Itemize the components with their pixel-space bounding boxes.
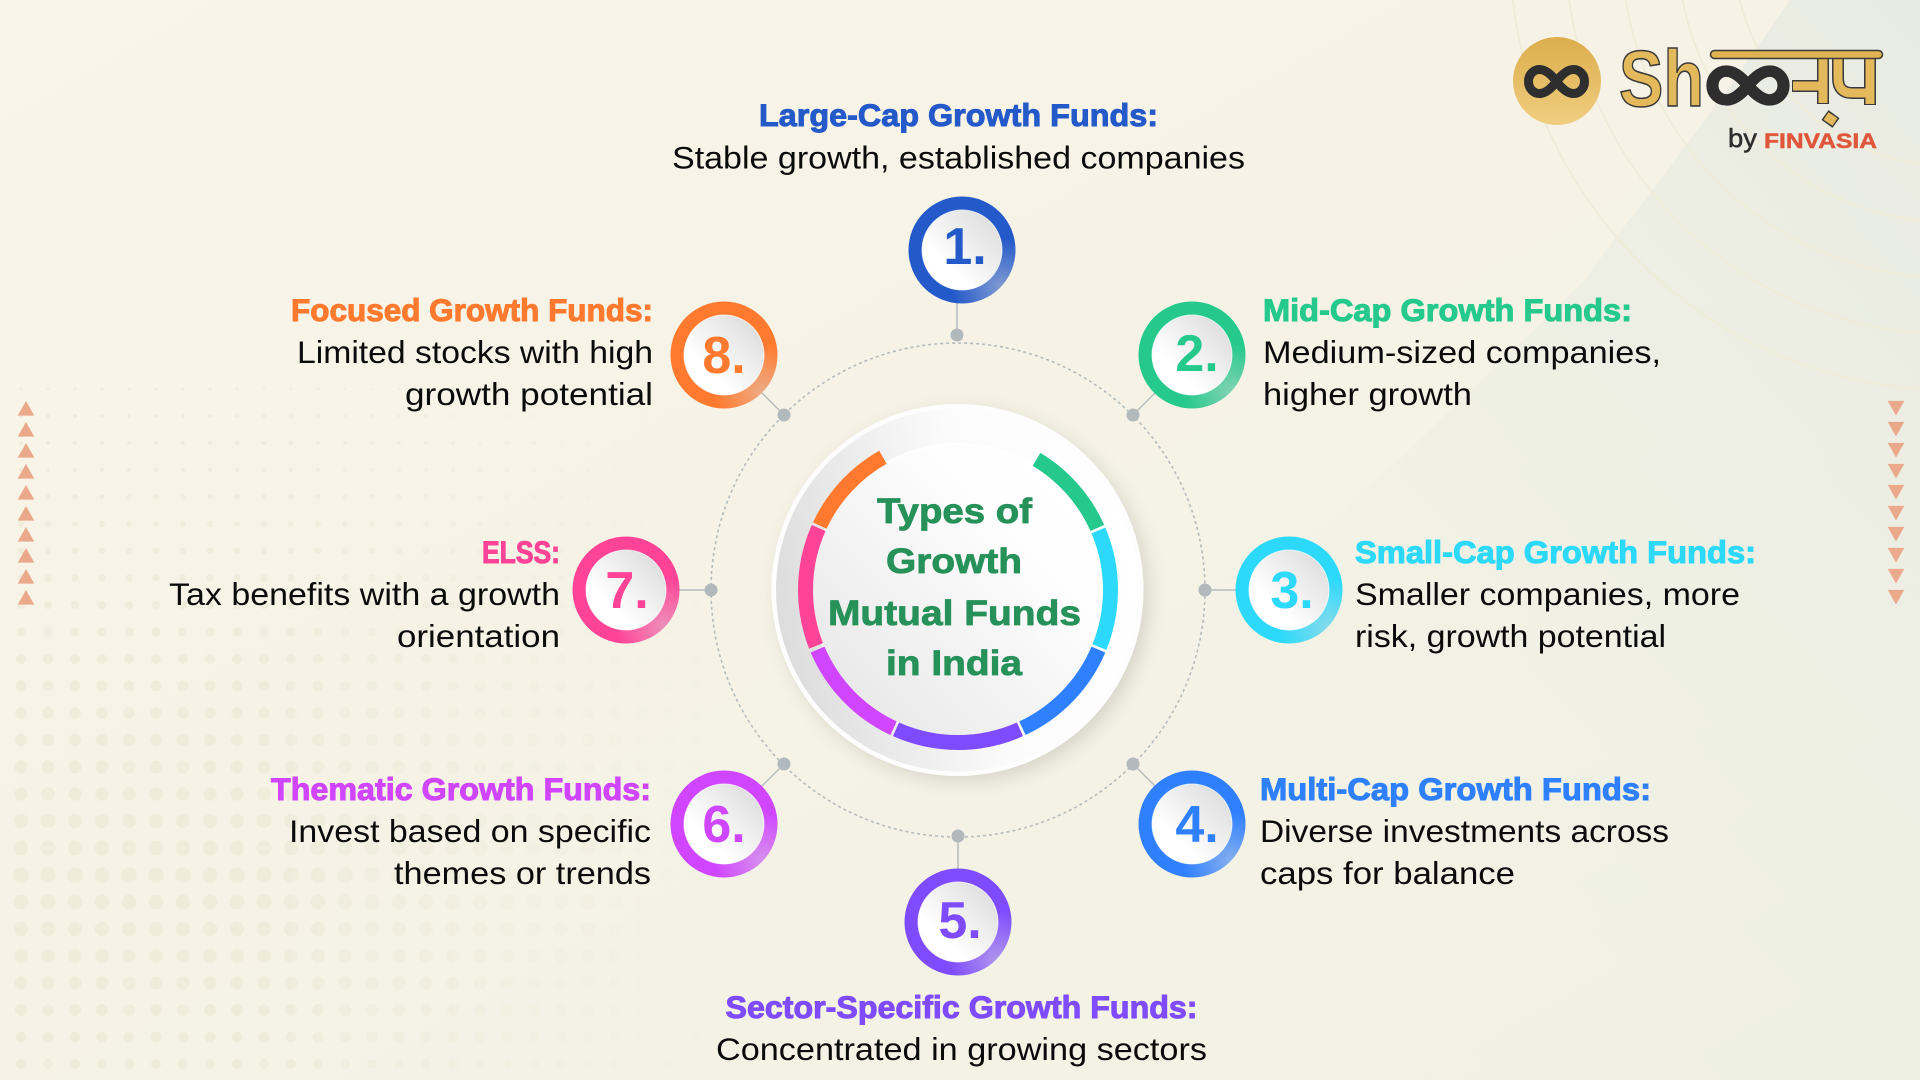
badge 8: 8. bbox=[702, 327, 746, 385]
logo: Shoonya by Finvasia bbox=[1513, 34, 1882, 153]
item 4 text: Diverse investments across bbox=[1260, 813, 1669, 849]
logo icon: gold circle with infinity bbox=[1513, 37, 1601, 125]
item 3 text: Small-Cap Growth Funds: bbox=[1355, 534, 1756, 570]
logo wordmark stylised brand mark bbox=[1710, 50, 1882, 123]
badge 2 bbox=[1138, 302, 1246, 408]
segmented colour ring bbox=[806, 438, 1110, 742]
item 4 text bbox=[1260, 771, 1669, 891]
logo wordmark infinity bbox=[1712, 71, 1784, 100]
item 2 text: higher growth bbox=[1263, 376, 1472, 412]
central title: Mutual Funds bbox=[828, 594, 1081, 633]
item 7 text bbox=[169, 534, 560, 654]
decorative down arrows right bbox=[1888, 401, 1904, 604]
item 8 text: Focused Growth Funds: bbox=[291, 292, 653, 328]
item 2 text: Medium-sized companies, bbox=[1263, 334, 1661, 370]
item 6 text: themes or trends bbox=[394, 855, 651, 891]
item 1 text: Stable growth, established companies bbox=[672, 140, 1245, 176]
badge 5: 5. bbox=[938, 892, 982, 950]
item 1 text: Large-Cap Growth Funds: bbox=[759, 97, 1158, 133]
badge 7 bbox=[572, 536, 680, 644]
item 8 text: growth potential bbox=[405, 376, 653, 412]
logo byline: by bbox=[1728, 123, 1757, 153]
item 8 text: Limited stocks with high bbox=[297, 334, 653, 370]
item 8 text bbox=[291, 292, 653, 412]
badge 4 bbox=[1138, 770, 1246, 878]
item 6 text bbox=[271, 771, 651, 891]
item 6 text: Thematic Growth Funds: bbox=[271, 771, 651, 807]
item 5 text: Sector-Specific Growth Funds: bbox=[726, 989, 1198, 1025]
item 5 text: Concentrated in growing sectors bbox=[716, 1031, 1207, 1067]
badge 1: 1. bbox=[943, 218, 987, 276]
decorative up arrows left bbox=[18, 401, 34, 605]
item 4 text: caps for balance bbox=[1260, 855, 1515, 891]
badge 2: 2. bbox=[1175, 325, 1219, 383]
item 1 text bbox=[672, 97, 1245, 176]
item 6 text: Invest based on specific bbox=[289, 813, 651, 849]
badge 3 bbox=[1236, 536, 1342, 644]
item 5 text bbox=[716, 989, 1207, 1067]
badge 1 bbox=[908, 196, 1016, 304]
badge 6 bbox=[670, 770, 778, 878]
central title: Types of bbox=[877, 492, 1032, 531]
badge 5 bbox=[904, 868, 1012, 976]
item 7 text: ELSS: bbox=[482, 534, 560, 570]
item 3 text: Smaller companies, more bbox=[1355, 576, 1740, 612]
item 3 text: risk, growth potential bbox=[1355, 618, 1666, 654]
central title: in India bbox=[886, 644, 1023, 683]
dot pattern lower left bbox=[14, 388, 401, 1069]
item 2 text: Mid-Cap Growth Funds: bbox=[1263, 292, 1632, 328]
item 3 text bbox=[1355, 534, 1756, 654]
central title bbox=[828, 492, 1081, 683]
central title: Growth bbox=[886, 542, 1022, 581]
logo wordmark Sh: Sh bbox=[1619, 34, 1704, 123]
badge 6: 6. bbox=[702, 796, 746, 854]
badge 4: 4. bbox=[1175, 796, 1219, 854]
badge 7: 7. bbox=[605, 562, 649, 620]
item 7 text: orientation bbox=[397, 618, 560, 654]
item 4 text: Multi-Cap Growth Funds: bbox=[1260, 771, 1651, 807]
badge 8 bbox=[670, 302, 778, 408]
item 7 text: Tax benefits with a growth bbox=[169, 576, 560, 612]
badge 3: 3. bbox=[1270, 562, 1314, 620]
item 2 text bbox=[1263, 292, 1661, 412]
logo Finvasia text: FINVASIA bbox=[1764, 130, 1877, 153]
orbit with connector nodes bbox=[676, 297, 1240, 872]
central disc bbox=[772, 404, 1144, 776]
